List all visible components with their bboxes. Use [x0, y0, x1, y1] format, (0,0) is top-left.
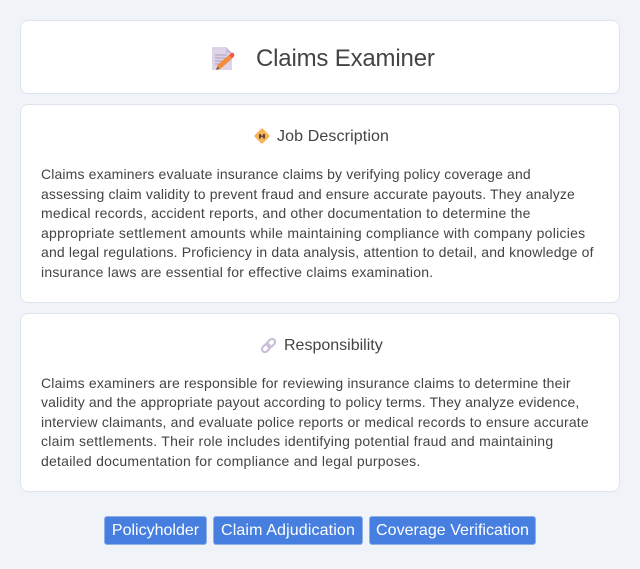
text: job description body: insurance laws are essential for effective claims examination. — [41, 264, 433, 280]
panel: responsibility — [20, 313, 620, 492]
tag: coverage verification: Coverage Verification — [376, 522, 529, 539]
text: job description body: appropriate settlement amounts while maintaining compliance with company policies — [41, 225, 585, 241]
text: responsibility body: validity and the appropriate payout according to policy terms. They analyze evidence, — [41, 394, 579, 410]
tag: policyholder: Policyholder — [112, 522, 199, 539]
tag: claim adjudication: Claim Adjudication — [221, 522, 355, 539]
tag: claim adjudication — [213, 516, 363, 545]
text: job description body: assessing claim validity to prevent fraud and ensure accurate payouts. They analyze — [41, 186, 575, 202]
icon: document with pencil — [212, 47, 234, 70]
tag: policyholder — [104, 516, 207, 545]
text: job description body: and legal regulations. Proficiency in data analysis, attention to detail, and knowledge of — [41, 244, 594, 260]
text: job description body: Claims examiners evaluate insurance claims by verifying policy coverage and — [41, 166, 531, 182]
text: responsibility body: claim settlements. Their role includes identifying potential fraud and maintaining — [41, 433, 553, 449]
heading: responsibility: Responsibility — [284, 337, 383, 354]
text: responsibility body: Claims examiners are responsible for reviewing insurance claims to determine their — [41, 375, 571, 391]
text: responsibility body: interview claimants, and evaluate police reports or medical records to ensure accurate — [41, 414, 589, 430]
text: responsibility body — [41, 375, 589, 469]
tag: coverage verification — [369, 516, 536, 545]
title: Claims Examiner — [256, 45, 435, 72]
panel: job description — [20, 104, 620, 303]
icon: diamond road sign — [254, 128, 270, 144]
panel: header — [20, 20, 620, 94]
icon: chain link — [260, 338, 276, 354]
text: responsibility body: detailed documentation for compliance and legal purposes. — [41, 453, 420, 469]
text: job description body: medical records, accident reports, and other documentation to determine the — [41, 205, 531, 221]
heading: job description: Job Description — [277, 128, 389, 145]
text: job description body — [41, 166, 594, 280]
